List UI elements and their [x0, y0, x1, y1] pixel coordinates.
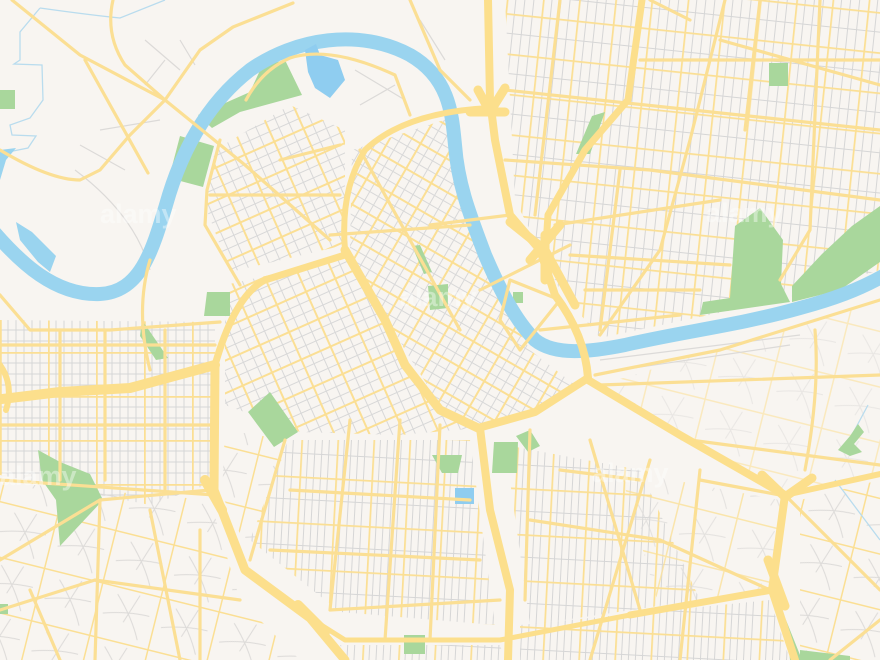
lake north — [305, 44, 345, 98]
park: east ridge — [792, 206, 880, 302]
interchange: south east — [762, 475, 812, 606]
park: shelby — [700, 208, 790, 315]
highway: inner loop north — [344, 108, 490, 250]
highway: south west — [214, 365, 345, 660]
park: far west — [0, 90, 15, 109]
park: south west large — [38, 450, 103, 546]
watermark: alamy — [400, 282, 477, 312]
park: triangle — [516, 430, 540, 452]
interchange: north — [470, 88, 505, 112]
park: north east square — [769, 63, 788, 86]
highway: southern loop — [310, 590, 772, 640]
park: west bank — [169, 136, 214, 187]
interchange: west edge — [0, 365, 9, 410]
interchange: south west — [205, 480, 325, 632]
watermark: alamy — [100, 199, 177, 229]
river — [0, 39, 880, 351]
park: south centre — [248, 392, 298, 447]
highway: north east — [545, 0, 642, 260]
watermark: alamy — [706, 198, 783, 228]
park: corner — [786, 620, 850, 660]
park: bottom — [404, 635, 425, 654]
park: south of loop — [492, 442, 518, 473]
pond: blue lot — [455, 488, 474, 504]
park: small south — [432, 455, 462, 473]
highway: downtown loop east — [488, 0, 588, 378]
park: strip west — [140, 320, 168, 360]
park: riverside north — [198, 60, 302, 128]
park: capitol — [428, 284, 448, 310]
park: square — [513, 292, 523, 303]
interchange: central — [510, 222, 575, 305]
inlet west — [0, 148, 56, 272]
park: north east strip — [576, 112, 605, 154]
highway: downtown loop south — [478, 378, 588, 428]
watermark: alamy — [592, 458, 669, 488]
highway: west spur — [0, 365, 215, 400]
watermark — [0, 198, 783, 491]
watermark: alamy — [0, 461, 77, 491]
park: mall — [412, 245, 432, 274]
park: lower east — [838, 424, 864, 456]
highway: downtown loop west — [345, 250, 478, 428]
park: west centre — [204, 292, 230, 316]
highway: south east — [588, 380, 795, 660]
highway: south — [480, 428, 510, 660]
